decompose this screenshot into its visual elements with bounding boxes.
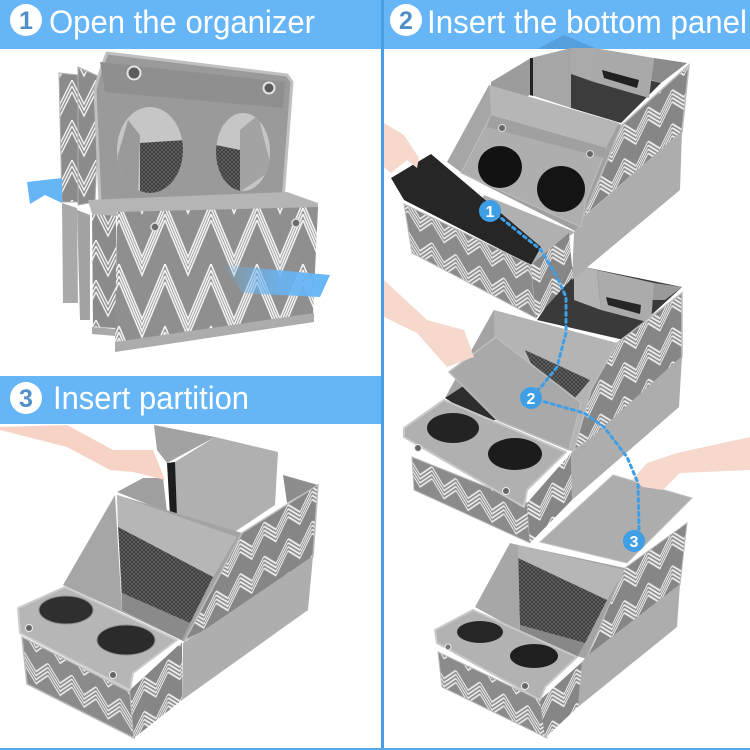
divider: vertical blue line — [381, 0, 384, 750]
badge: 2: 2 — [527, 391, 536, 408]
panel: step 3 insert partition — [0, 376, 381, 738]
heading bar: step 3 — [0, 376, 381, 424]
heading bar: step 3: Insert partition — [53, 380, 249, 416]
illustration: middle organizer with grey board — [404, 265, 682, 543]
illustration: folded organizer — [59, 53, 318, 352]
badge: 1: 1 — [486, 204, 495, 221]
badge: 3 — [623, 530, 645, 552]
heading bar: step 3: 3 — [19, 385, 33, 413]
illustration: hand holding partition — [0, 425, 165, 480]
illustration: bottom organizer with grey board — [435, 523, 687, 738]
illustration: hand holding black board — [384, 123, 419, 173]
illustration: top organizer with black board — [391, 48, 689, 318]
heading bar: step 2 — [384, 0, 750, 49]
heading bar: step 1: 1 — [19, 7, 33, 35]
arrow: fold inward left — [27, 178, 62, 204]
illustration: bottom panel being inserted — [540, 475, 692, 563]
arrow: dotted path from 1 to 2 — [490, 211, 566, 397]
illustration: assembled organizer with partition — [18, 425, 318, 738]
arrow: dotted path from 2 to 3 — [531, 398, 639, 530]
heading bar: step 2: Insert the bottom panel — [427, 4, 747, 40]
heading bar: step 2: 2 — [399, 7, 413, 35]
badge: 3: 3 — [630, 534, 639, 551]
badge: 2 — [520, 387, 542, 409]
panel: step 1 open the organizer — [0, 0, 381, 352]
heading bar: step 1: Open the organizer — [49, 4, 315, 40]
arrow: fold inward right — [223, 265, 330, 297]
illustration: hand holding grey board — [384, 280, 474, 367]
panel: step 2 insert the bottom panel — [384, 0, 750, 738]
heading bar: step 1 — [0, 0, 381, 49]
illustration: hand holding bottom panel — [632, 437, 750, 490]
divider: bottom blue strip — [0, 748, 750, 750]
badge: 1 — [479, 200, 501, 222]
